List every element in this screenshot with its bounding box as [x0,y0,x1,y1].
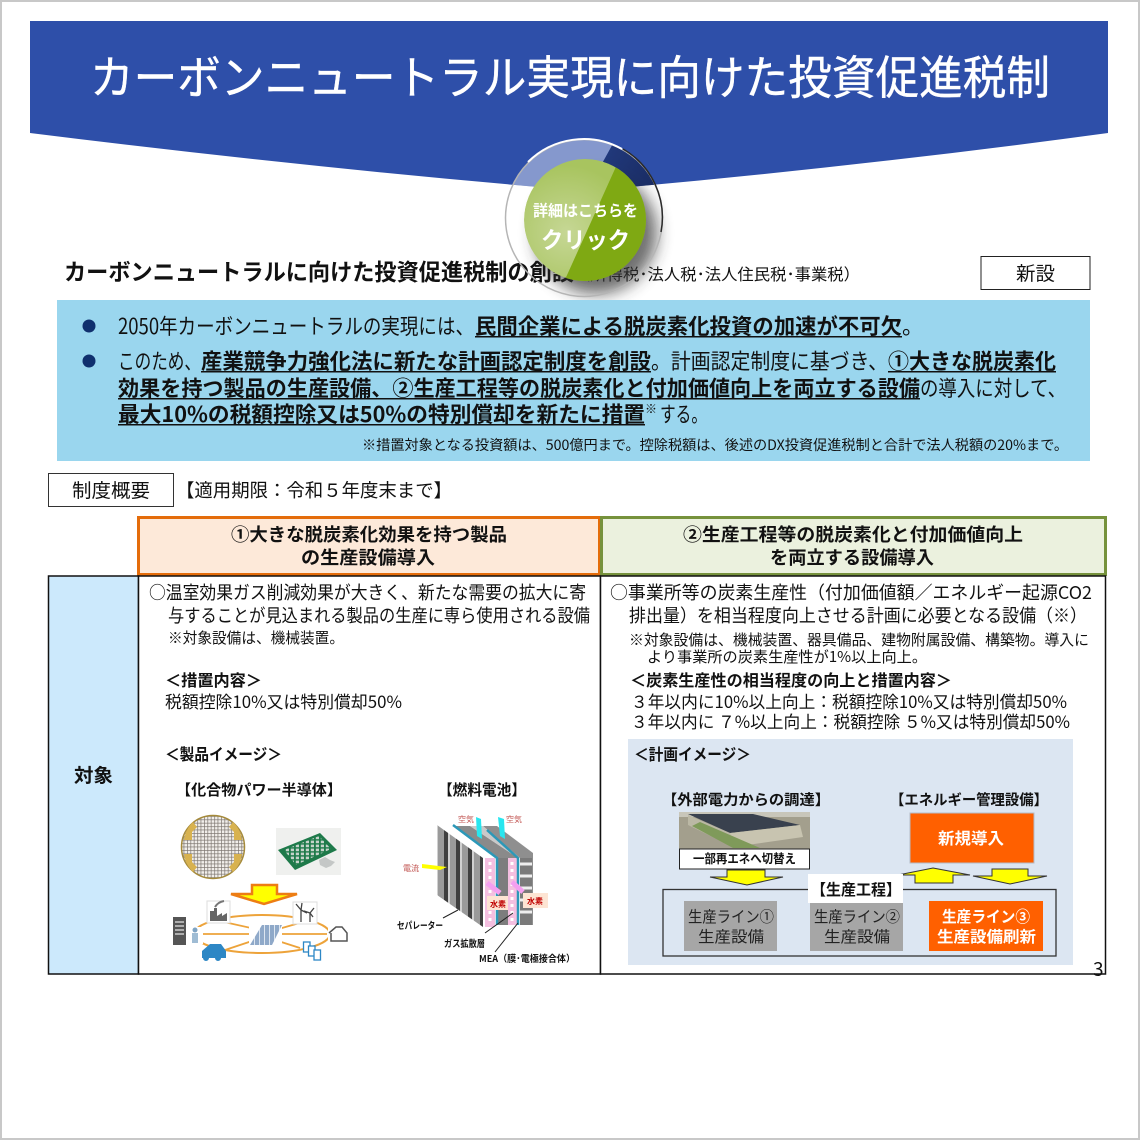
left column text: ○温室効果ガス削減効果が大きく、新たな需要の拡大に寄 [149,579,586,605]
plan image panel [628,739,1073,965]
product image: compound power semiconductor: 【化合物パワー半導体】 [176,779,342,800]
fuel cell stack [437,825,533,927]
icon: solar panels [249,924,282,945]
line 3: 生産設備刷新 [937,925,1037,947]
icon: orange arrow [231,885,297,904]
column header 1: の生産設備導入 [301,544,435,570]
network diagram [173,901,347,961]
icon: house [328,924,347,942]
new label: 新設 [1016,259,1055,286]
air arrows [476,817,505,839]
right column text: ＜炭素生産性の相当程度の向上と措置内容＞ [630,667,952,691]
summary text: ①大きな脱炭素化 [888,345,1056,376]
right column text [610,579,1092,733]
icon: circuit board [276,828,341,875]
right column text: ３年以内に10%以上向上：税額控除10%又は特別償却50% [631,688,1067,713]
summary text: 産業競争力強化法に新たな計画認定制度を創設 [201,345,651,376]
column header 2: を両立する設備導入 [770,544,934,570]
left column text: ＜製品イメージ＞ [165,741,282,765]
button text: 詳細はこちらを [533,199,638,221]
product image: fuel cell: 【燃料電池】 [438,779,526,800]
fuel cell labels: 電流 [403,863,419,874]
column header 2: ②生産工程等の脱炭素化と付加価値向上 [683,521,1023,547]
summary text: する。 [660,398,707,429]
fuel cell labels: MEA（膜･電極接合体） [479,951,575,965]
process label: 【生産工程】 [811,878,901,900]
icon: car [202,944,226,961]
summary text: 。 [902,310,924,341]
row label: 対象 [74,761,113,788]
energy management [890,789,1048,884]
section heading: （所得税･法人税･法人住民税･事業税） [574,261,860,285]
icon: phones [304,942,320,960]
product image: fuel cell [397,779,575,965]
line 1 [684,901,777,951]
arrow up [898,868,970,883]
hydrogen labels [487,893,548,910]
summary text: 民間企業による脱炭素化投資の加速が不可欠 [475,310,902,341]
bullet 1 [82,320,96,332]
arrow down [973,869,1047,884]
line 1: 生産ライン① [688,905,774,927]
page number: 3 [1093,955,1104,982]
summary text: 。計画認定制度に基づき、 [651,345,888,376]
new installation box: 新規導入 [938,825,1004,849]
fuel cell labels [397,814,575,965]
column header 1 [138,518,600,574]
left column text: 与することが見込まれる製品の生産に専ら使用される設備 [168,602,590,628]
left column text: ＜措置内容＞ [165,667,262,691]
right column text: 排出量）を相当程度向上させる計画に必要となる設備（※） [629,602,1087,628]
icon: wafer [182,816,244,878]
left column text: ※対象設備は、機械装置。 [168,627,344,648]
line 1: 生産設備 [698,925,764,947]
column header 1: ①大きな脱炭素化効果を持つ製品 [231,521,507,547]
switch label: 一部再エネへ切替え [693,848,796,867]
section heading: カーボンニュートラルに向けた投資促進税制の創設 [64,253,574,287]
icon: factory [207,901,230,923]
overview label [48,474,174,506]
fuel cell labels: 水素 [527,896,543,907]
header banner [30,21,1108,191]
new installation box [910,813,1034,863]
summary text: 最大10%の税額控除又は50%の特別償却を新たに措置 [118,398,645,429]
external power: 【外部電力からの調達】 [662,789,830,810]
click button: クリック [541,221,630,255]
footnote: ※措置対象となる投資額は、500億円まで。控除税額は、後述のDX投資促進税制と合計で法人税額の20%まで。 [362,435,1068,455]
summary text: 2050年カーボンニュートラルの実現には、 [118,310,474,341]
production process [663,874,1056,956]
right column text: より事業所の炭素生産性が1%以上向上。 [647,646,927,667]
summary text: の導入に対して、 [920,372,1066,403]
summary text [118,310,1066,429]
right column text: ３年以内に ７%以上向上：税額控除 ５%又は特別償却50% [631,708,1070,733]
line 3 [929,901,1043,951]
factory photo [679,812,810,849]
click button [504,138,669,300]
line 2: 生産ライン② [814,905,900,927]
fuel cell labels: セパレーター [397,918,443,932]
summary text: ※ [645,400,657,417]
line 3: 生産ライン③ [942,905,1030,927]
column header 2 [602,518,1106,574]
fuel cell labels: 水素 [490,899,506,910]
left column text [149,579,590,765]
right column text: ※対象設備は、機械装置、器具備品、建物附属設備、構築物。導入に [629,629,1089,650]
table row: target [48,576,1106,974]
icon: wind turbines [293,902,317,924]
current arrow [422,864,447,870]
title: カーボンニュートラル実現に向けた投資促進税制 [90,42,1050,108]
summary text: このため、 [118,345,201,376]
line 2 [810,903,903,951]
plan heading: ＜計画イメージ＞ [634,741,751,765]
overview label: 制度概要 [72,476,150,503]
left column text: 税額控除10%又は特別償却50% [165,688,402,713]
energy management: 【エネルギー管理設備】 [890,789,1048,810]
fuel cell labels: 空気 [506,814,522,825]
fuel cell labels: ガス拡散層 [444,936,485,950]
external power [662,789,830,885]
arrow down [710,870,783,885]
product image: compound power semiconductor [173,779,347,961]
fuel cell labels: 空気 [458,814,474,825]
icon: person [189,927,203,944]
section heading [64,253,860,287]
icon: building [173,917,186,945]
summary panel [57,300,1090,461]
period of application: 【適用期限：令和５年度末まで】 [176,477,452,503]
bullet 2 [82,354,96,368]
new label [981,256,1090,290]
summary text: 効果を持つ製品の生産設備、②生産工程等の脱炭素化と付加価値向上を両立する設備 [118,372,920,403]
line 2: 生産設備 [824,925,890,947]
right column text: ○事業所等の炭素生産性（付加価値額／エネルギー起源CO2 [610,579,1092,605]
